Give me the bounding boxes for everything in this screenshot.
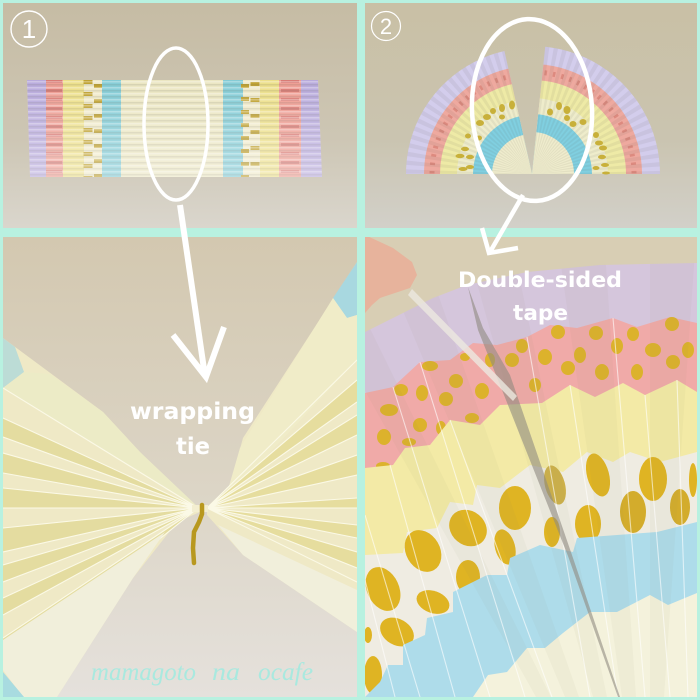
panel: wrapping tie close-up [3,237,357,697]
watermark: na [212,659,240,686]
panel: double-sided tape close-up [365,237,697,697]
panel: step 1 folded strip photo [3,3,357,228]
left wing of paper [3,338,200,697]
number 1 badge [11,11,47,47]
lavender band [365,263,697,393]
pleat shading [279,237,696,697]
gold dots on pink [376,317,694,470]
number 2 badge [372,12,400,40]
label: double-sided tape: Double-sided [458,268,622,292]
label: wrapping tie: tie [176,434,210,460]
fan: gold dots [456,100,610,174]
arrow: down to double-sided tape [482,195,523,253]
label: double-sided tape [458,268,622,325]
pink band [365,317,697,468]
folded paper strip [20,78,330,180]
watermark [92,662,312,686]
gold dots on white [359,451,697,694]
watermark: ocafe [258,659,313,686]
blue band [365,522,697,697]
white band [365,452,697,697]
watermark: mamagoto [91,659,196,686]
label: wrapping tie: wrapping [130,399,255,425]
fan: right wedge [532,46,660,174]
label: double-sided tape: tape [513,301,568,325]
arrow: down to wrapping tie [173,205,224,377]
gold wrapping tie [193,505,202,563]
pleat creases [365,318,688,697]
centre gap crease [468,287,620,697]
yellow band [365,380,697,555]
label: wrapping tie [130,399,255,460]
number 2 badge: 2 [380,14,392,39]
hand [365,235,417,313]
right wing of paper [207,262,357,632]
panel: step 2 half fan photo [365,3,697,228]
fan: left wedge [406,51,532,174]
centre fold of paper [192,505,208,512]
circle highlight: step 1 [144,48,208,200]
circle highlight: step 2 [467,16,597,204]
number 1 badge: 1 [22,14,36,44]
double-sided tape strip [408,289,517,401]
cream band [473,593,697,697]
